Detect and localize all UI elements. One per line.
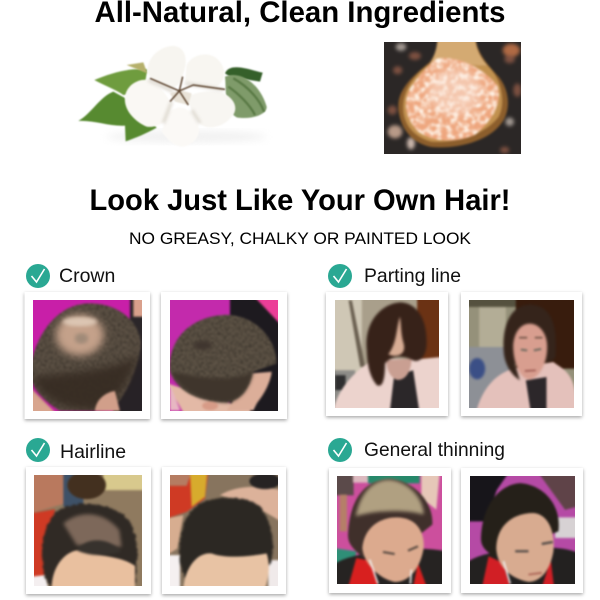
panel: hairline [26,438,286,594]
photo card: thinning after [461,468,583,593]
photo card: crown after [161,292,287,419]
subheading: NO GREASY, CHALKY OR PAINTED LOOK [129,230,471,248]
photo card: parting after [461,292,582,416]
icon: check badge crown [26,264,50,288]
image: pink salt in wooden spoon [384,42,521,154]
label: general thinning: General thinning [364,439,505,461]
panel: general thinning [328,438,583,593]
panel: parting line [326,264,582,416]
label: parting line: Parting line [364,265,461,287]
photo card: hairline before [26,467,151,594]
label: hairline: Hairline [60,441,126,463]
icon: check badge parting line [328,264,352,288]
photo card: crown before [24,292,150,419]
icon: check badge hairline [26,438,50,462]
label: crown: Crown [59,265,115,287]
panel: crown [24,264,287,419]
photo card: thinning before [329,468,451,593]
photo card: parting before [326,292,448,416]
photo card: hairline after [162,467,286,594]
icon: check badge general thinning [328,438,352,462]
heading: look just like your own hair: Look Just Like Your Own Hair! [90,184,510,217]
image: cotton boll with leaves [78,46,267,147]
